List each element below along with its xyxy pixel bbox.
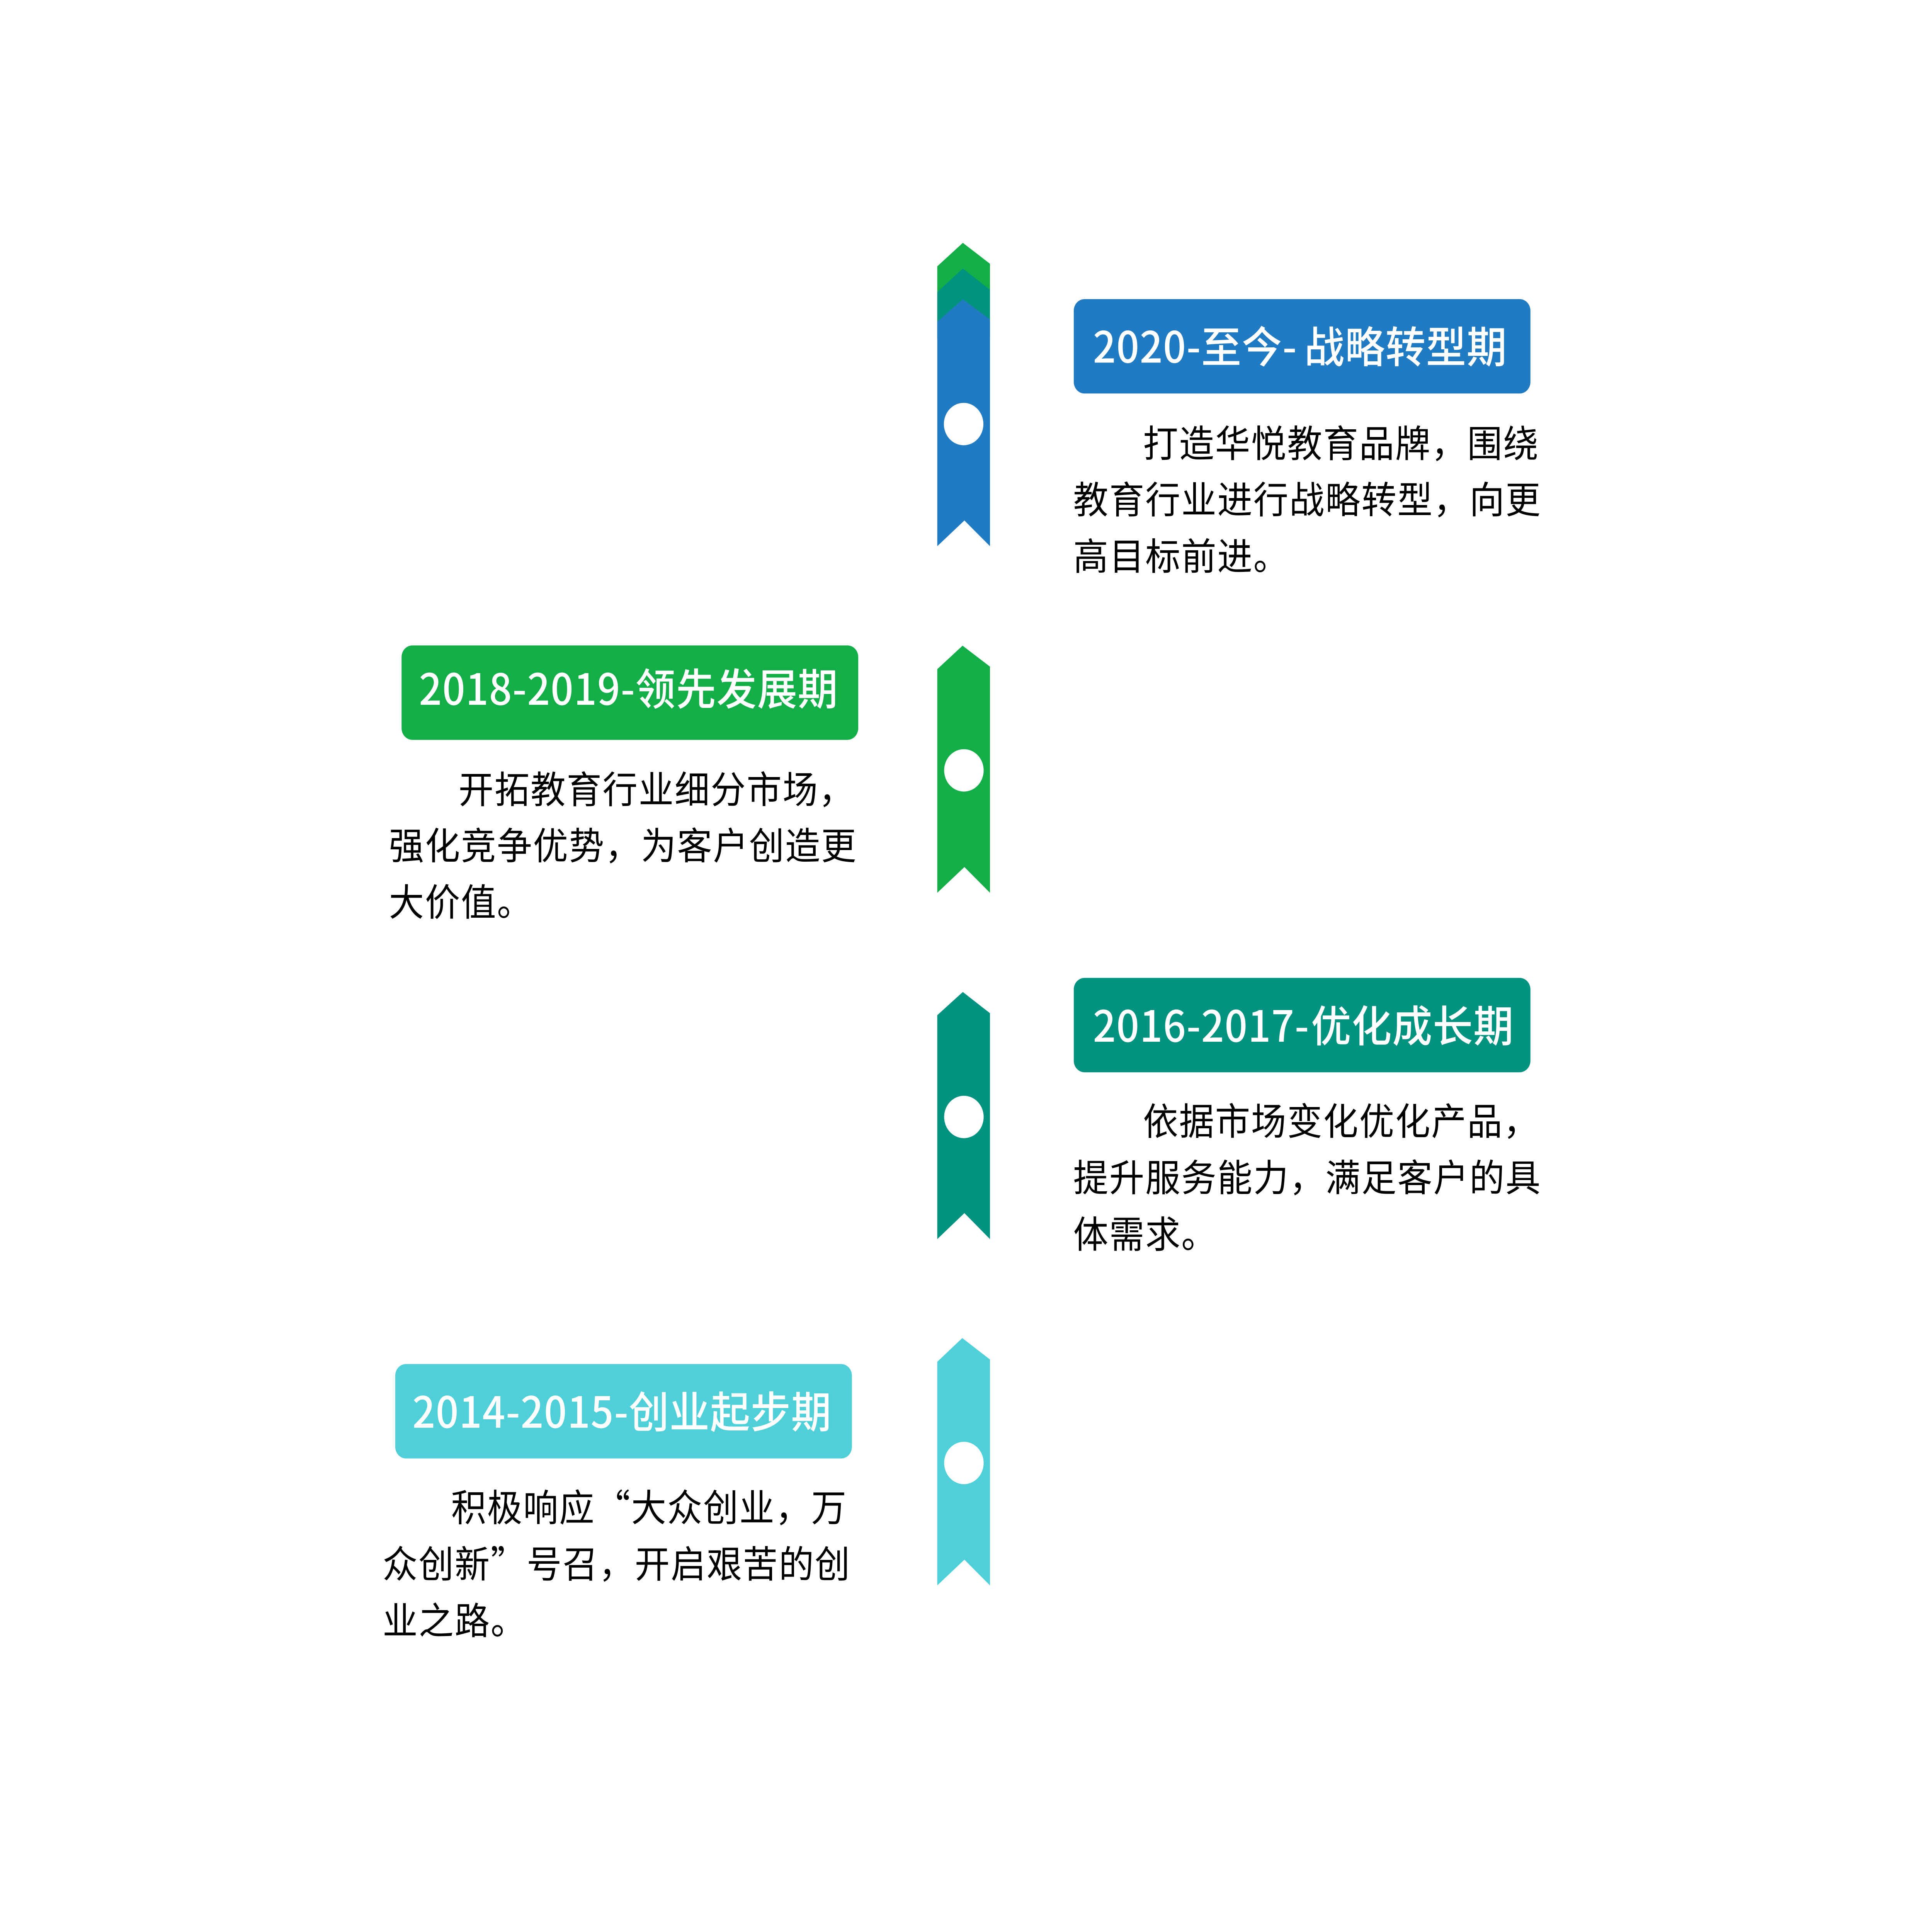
ribbon: 2020 with stacked green and teal tips: [937, 243, 990, 546]
text block: 2014-2015: 众创新”号召，开启艰苦的创: [383, 1535, 851, 1589]
heading badge: 2020-至今: 2020-至今-战略转型期: [1093, 313, 1507, 375]
text block: 2016-2017: 依据市场变化优化产品，: [1143, 1092, 1539, 1146]
text block: 2014-2015: 积极响应“大众创业，万: [451, 1478, 847, 1532]
text block: 2016-2017: 体需求。: [1073, 1205, 1217, 1259]
panel: 2014-2015: [383, 1338, 990, 1646]
ribbon: 2016-2017: [937, 992, 990, 1239]
text block: 2020-至今: 打造华悦教育品牌，围绕: [1143, 414, 1539, 468]
heading badge: 2014-2015: [395, 1364, 852, 1459]
ribbon: 2018-2019: [937, 646, 990, 893]
heading badge: 2018-2019: [401, 645, 858, 740]
panel: 2016-2017: [937, 978, 1541, 1259]
heading badge: 2018-2019: 2018-2019-领先发展期: [419, 655, 838, 717]
heading badge: 2020-至今: [1074, 299, 1531, 393]
heading badge: 2016-2017: 2016-2017-优化成长期: [1093, 992, 1514, 1054]
text block: 2018-2019: 开拓教育行业细分市场，: [459, 760, 855, 815]
heading badge: 2014-2015: 2014-2015-创业起步期: [412, 1378, 832, 1440]
heading badge: 2016-2017: [1074, 978, 1531, 1072]
text block: 2014-2015: 业之路。: [383, 1591, 527, 1646]
text block: 2020-至今: 教育行业进行战略转型，向更: [1073, 470, 1541, 525]
panel: 2020-至今: [937, 243, 1541, 581]
text block: 2018-2019: 强化竞争优势，为客户创造更: [389, 816, 857, 871]
text block: 2020-至今: 高目标前进。: [1073, 527, 1289, 581]
ribbon: 2014-2015: [937, 1338, 990, 1585]
panel: 2018-2019: [389, 645, 990, 927]
text block: 2016-2017: 提升服务能力，满足客户的具: [1073, 1148, 1541, 1202]
text block: 2018-2019: 大价值。: [389, 872, 533, 927]
